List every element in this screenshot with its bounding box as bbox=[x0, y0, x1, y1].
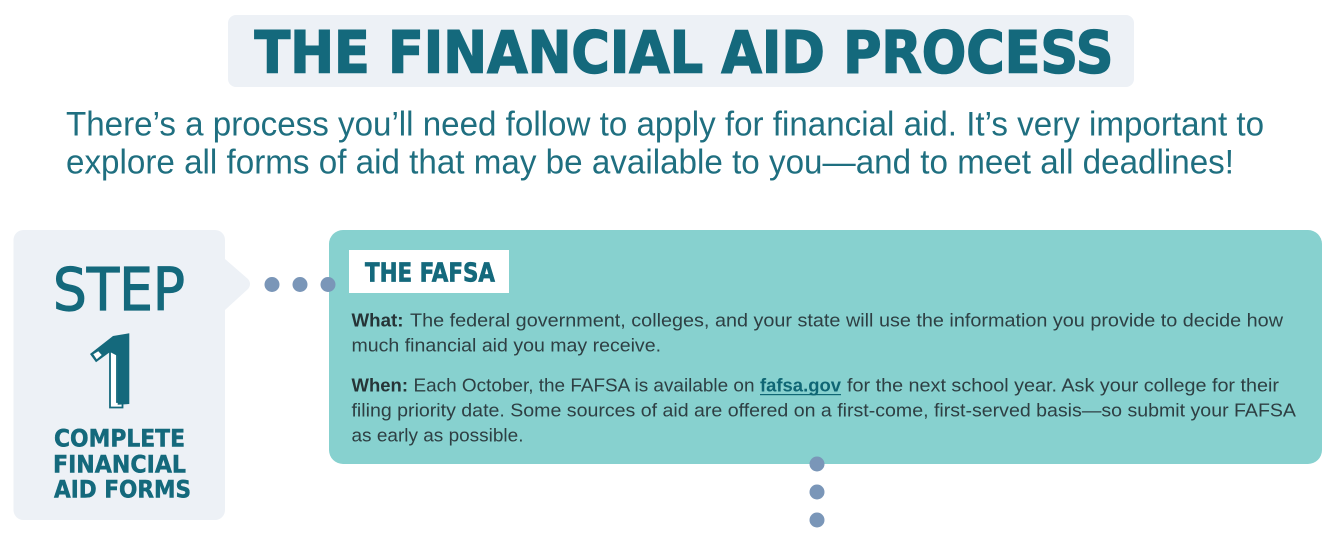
intro text: explore all forms of aid that may be available to you—and to meet all deadlines! bbox=[66, 144, 1234, 182]
when paragraph: for the next school year. Ask your college for their bbox=[847, 374, 1279, 396]
intro text: There’s a process you’ll need follow to apply for financial aid. It’s very important to bbox=[66, 106, 1264, 144]
panel: step 1 bbox=[14, 230, 250, 520]
intro text bbox=[66, 106, 1264, 182]
panel heading: THE FAFSA bbox=[365, 258, 495, 288]
connector dots: horizontal bbox=[264, 277, 336, 292]
what paragraph bbox=[352, 310, 1284, 356]
title banner: THE FINANCIAL AID PROCESS bbox=[254, 20, 1114, 86]
when paragraph: fafsa.gov bbox=[760, 374, 842, 396]
when paragraph: as early as possible. bbox=[352, 424, 524, 446]
step description: AID FORMS bbox=[54, 476, 191, 504]
step heading: STEP bbox=[53, 255, 185, 324]
step description bbox=[53, 424, 191, 504]
what paragraph: The federal government, colleges, and your state will use the information you provide to decide how bbox=[410, 310, 1284, 330]
what paragraph: much financial aid you may receive. bbox=[352, 334, 661, 356]
connector dots: vertical bbox=[810, 456, 824, 528]
when paragraph: filing priority date. Some sources of aid are offered on a first-come, first-served basis—so submit your FAFSA bbox=[352, 400, 1297, 420]
step description: FINANCIAL bbox=[53, 450, 186, 478]
when paragraph bbox=[352, 374, 1297, 446]
panel: the FAFSA bbox=[329, 230, 1322, 464]
when paragraph: When: bbox=[352, 374, 408, 396]
what paragraph: What: bbox=[352, 310, 404, 330]
when paragraph: Each October, the FAFSA is available on bbox=[414, 374, 754, 396]
panel heading bbox=[349, 250, 509, 293]
step description: COMPLETE bbox=[54, 424, 185, 452]
icon: numeral 1 bbox=[90, 333, 129, 408]
